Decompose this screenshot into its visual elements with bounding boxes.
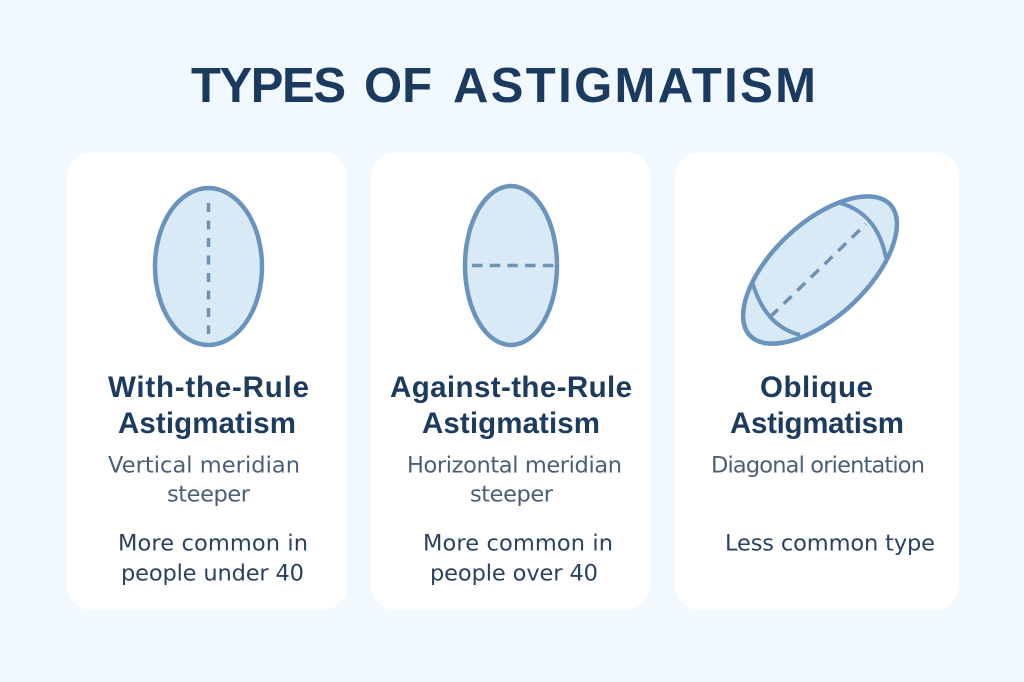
heading: oblique: Astigmatism <box>730 407 904 440</box>
heading: against-the-rule: Astigmatism <box>422 407 600 440</box>
description: with-the-rule: steeper <box>167 482 251 508</box>
icon: vertical meridian oval <box>155 188 262 345</box>
heading: against-the-rule: Against-the-Rule <box>390 371 632 404</box>
prevalence: against-the-rule <box>423 530 613 586</box>
panel: against-the-rule <box>371 152 650 610</box>
prevalence: with-the-rule: More common in <box>118 530 308 556</box>
description: oblique: Diagonal orientation <box>711 452 925 478</box>
prevalence: oblique: Less common type <box>725 530 935 556</box>
title: ASTIGMATISM <box>453 59 816 113</box>
title <box>191 59 816 113</box>
prevalence: with-the-rule: people under 40 <box>121 560 304 586</box>
panel: oblique <box>675 152 959 610</box>
description: against-the-rule: Horizontal meridian <box>407 452 622 478</box>
prevalence: against-the-rule: More common in <box>423 530 613 556</box>
heading: oblique: Oblique <box>760 371 873 404</box>
icon: horizontal meridian oval <box>465 186 557 345</box>
heading: oblique <box>730 371 904 440</box>
icon: diagonal meridian oval <box>718 170 922 370</box>
description: with-the-rule <box>108 452 300 508</box>
panel: with-the-rule <box>67 152 347 610</box>
heading: with-the-rule: With-the-Rule <box>108 371 309 404</box>
title: OF <box>364 59 432 113</box>
description: against-the-rule: steeper <box>470 482 554 508</box>
heading: against-the-rule <box>390 371 632 440</box>
heading: with-the-rule <box>108 371 309 440</box>
description: against-the-rule <box>407 452 622 508</box>
heading: with-the-rule: Astigmatism <box>118 407 296 440</box>
title: TYPES <box>191 59 346 113</box>
description: with-the-rule: Vertical meridian <box>108 452 300 478</box>
prevalence: with-the-rule <box>118 530 308 586</box>
prevalence: against-the-rule: people over 40 <box>430 560 598 586</box>
